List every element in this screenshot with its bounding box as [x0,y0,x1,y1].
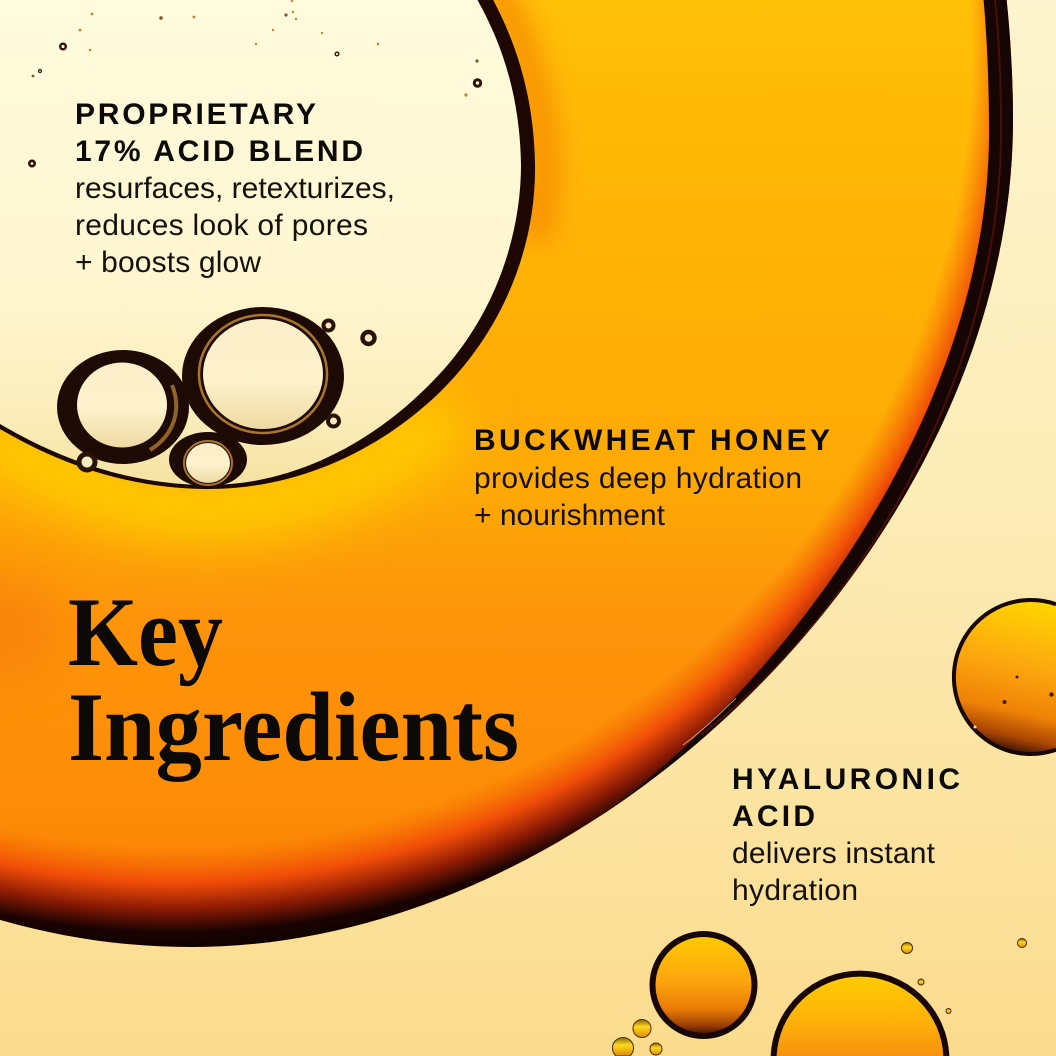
medium bubble [57,350,189,464]
satellite bubbles [79,320,374,470]
text: buckwheat honey: BUCKWHEAT HONEY [474,424,830,457]
text: proprietary acid blend: + boosts glow [75,246,261,279]
text: buckwheat honey: provides deep hydration [474,462,802,495]
tiny specks [32,0,479,97]
text: hyaluronic acid: HYALURONIC [732,763,960,796]
tiny ring bubbles [29,44,481,166]
bubble cluster [57,307,374,487]
text: hyaluronic acid [732,763,960,907]
droplet right [954,600,1056,754]
small droplets [612,938,1026,1056]
text: proprietary acid blend: reduces look of pores [75,209,368,242]
title: Key [68,578,223,687]
small bubble [169,432,247,487]
droplet bottom centre [652,934,754,1036]
text: hyaluronic acid: ACID [732,800,815,833]
title: Ingredients [68,673,519,782]
text: hyaluronic acid: hydration [732,874,858,907]
droplet bottom right [774,974,946,1056]
text: proprietary acid blend: resurfaces, retexturizes, [75,172,395,205]
text: proprietary acid blend: 17% ACID BLEND [75,135,363,168]
large bubble [182,307,344,445]
central opening [0,0,535,489]
text: proprietary acid blend: PROPRIETARY [75,98,316,131]
text: hyaluronic acid: delivers instant [732,837,936,870]
title [68,578,519,782]
text: proprietary acid blend [75,98,395,279]
text: buckwheat honey: + nourishment [474,499,666,532]
text: buckwheat honey [474,424,830,532]
